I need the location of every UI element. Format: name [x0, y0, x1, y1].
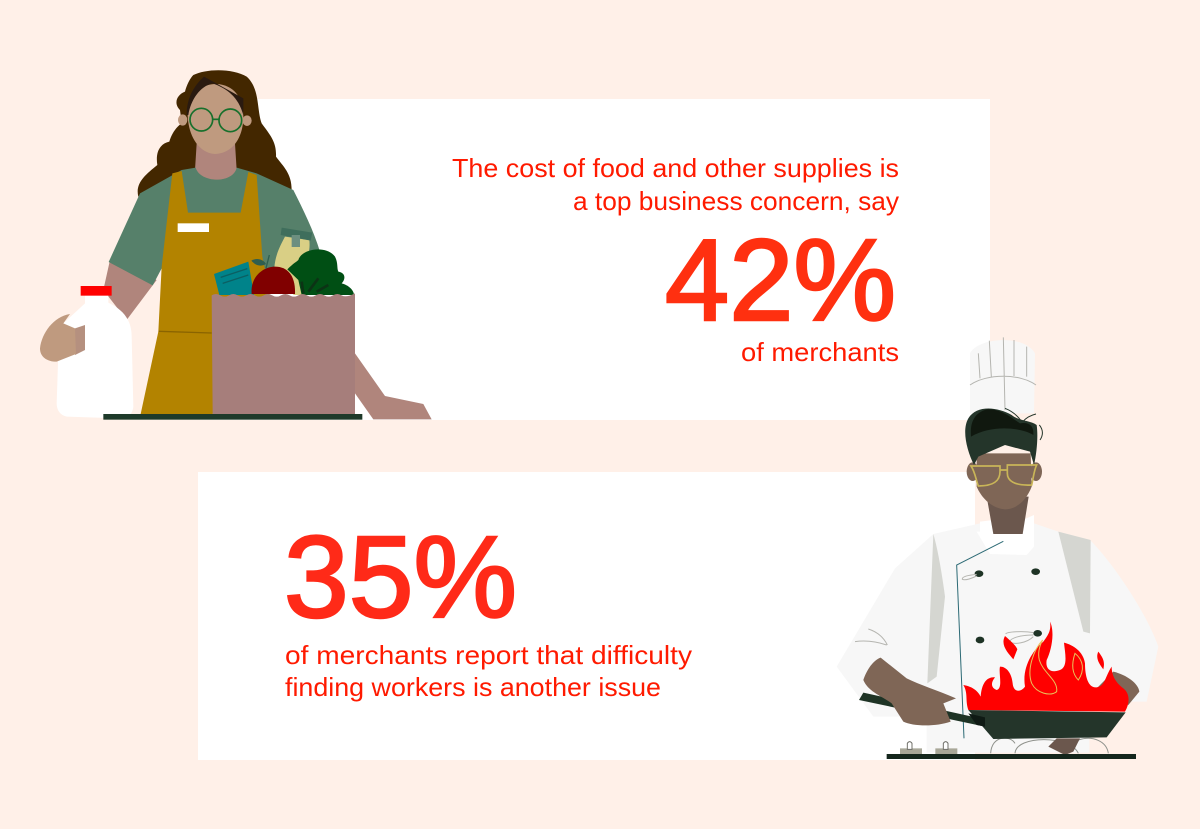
- counter: [103, 414, 362, 420]
- illustration: chef: [837, 337, 1158, 759]
- icon: burners: [991, 738, 1108, 753]
- stove: [887, 742, 1136, 759]
- chef head: [965, 408, 1042, 534]
- apron: [141, 171, 270, 414]
- stat: 42%: 42%: [665, 215, 896, 345]
- text: cost concern: The cost of food and other supplies is: [452, 153, 899, 183]
- icon: milk jug: [40, 286, 133, 418]
- paper bag: [212, 293, 355, 414]
- icon: apple: [251, 255, 295, 294]
- illustration: grocer: [40, 70, 432, 420]
- icon: flames: [963, 622, 1129, 712]
- icon: greens: [287, 249, 354, 295]
- stat: 35%: 35%: [284, 512, 517, 642]
- panel: workers: [198, 472, 975, 760]
- icon: glasses: [190, 108, 242, 132]
- panel: food cost: [200, 99, 990, 420]
- text: cost concern: [452, 153, 899, 216]
- text: difficulty finding workers: of merchants report that difficulty: [285, 640, 692, 670]
- text: difficulty finding workers: [285, 640, 692, 702]
- icon: frying pan: [859, 693, 1126, 739]
- icon: chef glasses: [971, 465, 1037, 486]
- icon: jar: [274, 228, 312, 290]
- text: cost concern: a top business concern, say: [573, 186, 899, 216]
- chef hat: [970, 337, 1036, 413]
- icon: can: [214, 262, 254, 295]
- text: difficulty finding workers: finding workers is another issue: [285, 672, 661, 702]
- jacket: [837, 523, 1158, 753]
- text: of merchants: of merchants: [741, 337, 899, 367]
- chef hands: [863, 658, 956, 725]
